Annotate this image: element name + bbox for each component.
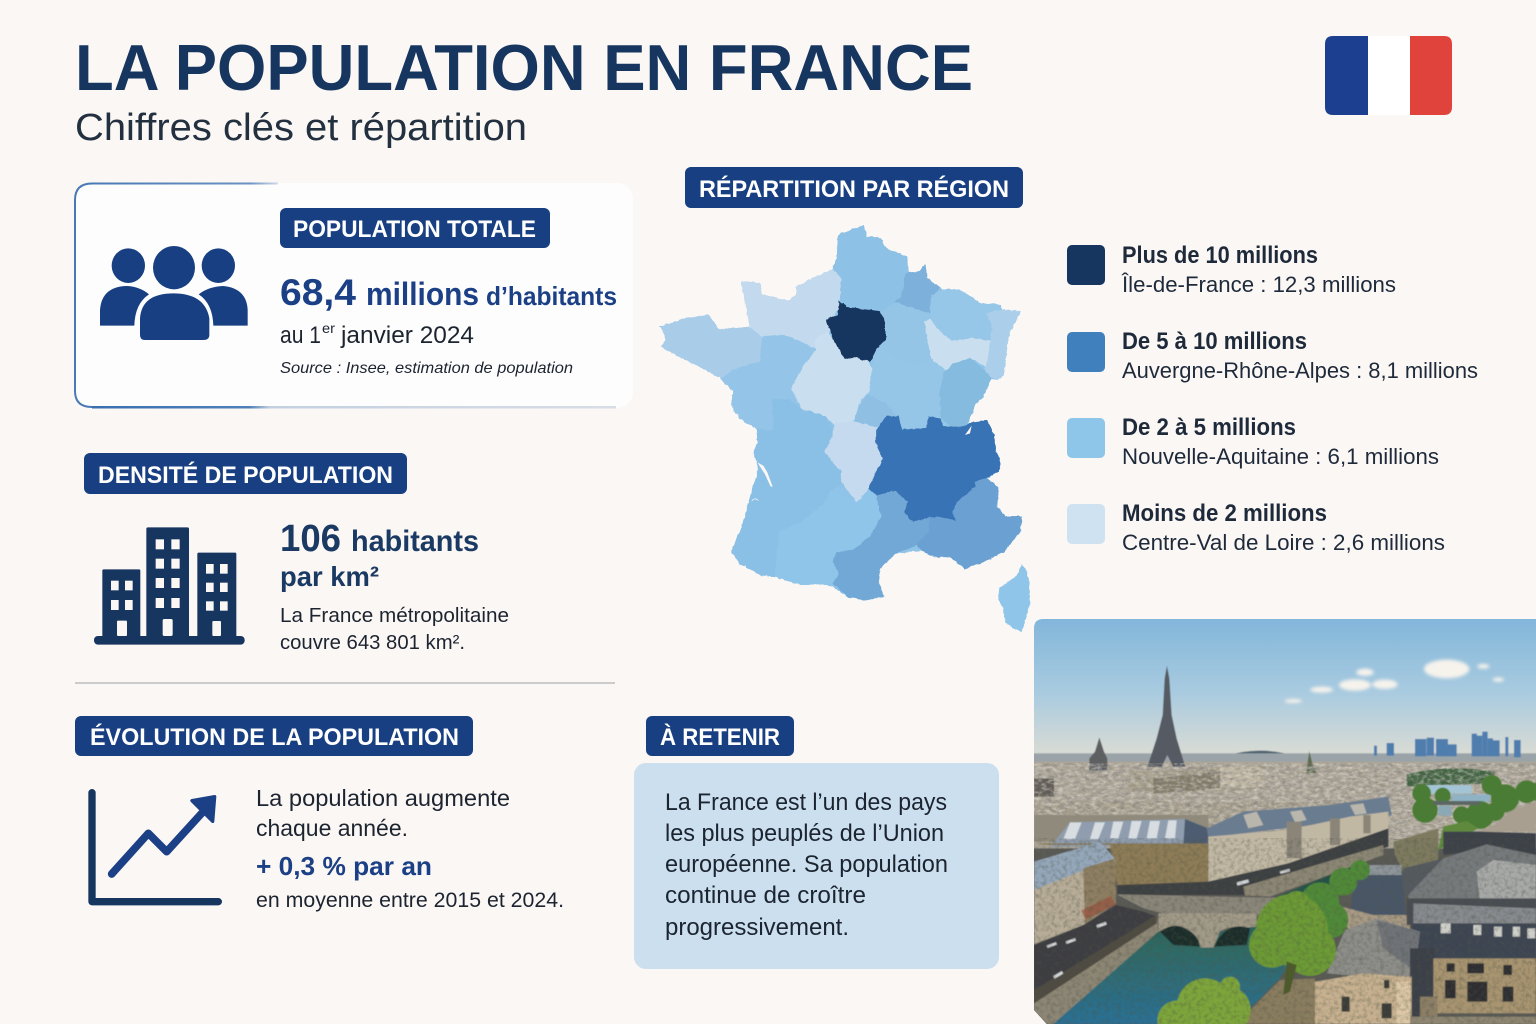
river [1043, 860, 1367, 1024]
subtitle: Chiffres clés et répartition [75, 107, 527, 149]
heading: densité: DENSITÉ DE POPULATION [98, 461, 393, 489]
legend item: plus de 10 millions [1067, 242, 1396, 297]
region: Champagne [877, 302, 933, 367]
panel: densité de population [84, 453, 509, 654]
road [1034, 905, 1157, 998]
key figure: 68,4 millions: millions [366, 276, 479, 312]
date: er [322, 320, 335, 336]
key figure: 68,4 millions: d’habitants [486, 281, 617, 311]
heading: évolution [75, 716, 473, 756]
density note: couvre 643 801 km². [280, 631, 465, 654]
icon: buildings [94, 527, 245, 645]
buildings row [1050, 818, 1186, 847]
source: Source : Insee, estimation de population [280, 360, 573, 377]
icon: group of people [100, 246, 248, 340]
key figure: 106 habitants par km² [280, 518, 479, 592]
region: Pays de la Loire [722, 335, 817, 430]
photo: Paris skyline and the Seine [1030, 615, 1536, 1024]
takeaway text: progressivement. [665, 914, 849, 941]
region: Bretagne [660, 315, 765, 380]
region: Hauts-de-France [833, 226, 908, 317]
legend item: moins de 2 millions: Centre-Val de Loire : 2,6 millions [1122, 530, 1445, 555]
map: France regions [660, 226, 1029, 632]
evolution text: La population augmente [256, 785, 510, 811]
evolution text: + 0,3 % par an [256, 851, 432, 881]
region: Provence-Alpes-Côte d'Azur [917, 478, 1022, 568]
region: Normandie [742, 270, 843, 352]
key figure: 68,4 millions [280, 272, 617, 313]
density note [280, 604, 509, 654]
region: Centre-Val de Loire [792, 332, 873, 425]
rooftops band left [1034, 815, 1208, 842]
legend item: de 2 à 5 millions: De 2 à 5 millions [1122, 414, 1296, 441]
key figure: 106 habitants par km²: 106 [280, 518, 341, 560]
region: Nouvelle-Aquitaine [732, 395, 843, 577]
key figure: 106 habitants par km²: par km² [280, 561, 379, 592]
region: Haute-Marne [925, 319, 990, 372]
panel: évolution de la population [75, 716, 564, 912]
legend item: de 5 à 10 millions: Auvergne-Rhône-Alpes : 8,1 millions [1122, 358, 1478, 383]
key figure: 106 habitants par km²: habitants [351, 525, 479, 558]
road upper bank [1117, 828, 1388, 895]
legend item: plus de 10 millions: Île-de-France : 12,3 millions [1121, 272, 1396, 297]
heading: évolution: ÉVOLUTION DE LA POPULATION [90, 723, 459, 751]
legend item: moins de 2 millions: Moins de 2 millions [1122, 500, 1327, 527]
legend item: de 2 à 5 millions: Nouvelle-Aquitaine : 6,1 millions [1122, 444, 1439, 469]
takeaway text: les plus peuplés de l’Union [665, 820, 944, 847]
panel: population totale [75, 182, 633, 408]
key figure: 68,4 millions: 68,4 [280, 272, 356, 313]
legend item: de 5 à 10 millions: De 5 à 10 millions [1122, 328, 1307, 355]
evolution text [256, 785, 564, 912]
cars [1047, 869, 1290, 979]
region: Auvergne-Rhône-Alpes [869, 417, 1000, 522]
icon: growth chart [92, 793, 218, 902]
legend item: de 2 à 5 millions [1067, 414, 1439, 469]
right buildings [1393, 828, 1439, 871]
legend item: moins de 2 millions [1067, 500, 1445, 555]
heading: densité [84, 453, 407, 494]
region: Nièvre [854, 395, 896, 428]
takeaway text: continue de croître [665, 882, 866, 909]
bridge [1117, 894, 1277, 917]
evolution text: chaque année. [256, 815, 408, 841]
heading: population totale: POPULATION TOTALE [293, 216, 536, 243]
legend item: plus de 10 millions: Plus de 10 millions [1122, 242, 1318, 269]
heading: répartition par région [685, 167, 1023, 208]
region: Lorraine [930, 290, 1002, 342]
region: Occitanie ouest [775, 490, 882, 587]
density note: La France métropolitaine [280, 604, 509, 627]
region: Île-de-France [827, 302, 885, 362]
date [280, 320, 474, 349]
takeaway text: européenne. Sa population [665, 851, 948, 878]
embankments [1034, 915, 1158, 1024]
trees [1240, 978, 1315, 1024]
icon: French flag [1325, 36, 1452, 115]
region: Franche-Comté [940, 358, 992, 428]
heading: répartition par région: RÉPARTITION PAR RÉGION [699, 175, 1009, 203]
panel: à retenir [634, 716, 999, 969]
region: Limousin [825, 422, 883, 502]
takeaway text: La France est l’un des pays [665, 789, 947, 816]
heading: à retenir [646, 716, 794, 756]
date: au 1 [280, 322, 321, 349]
region: Ardennes [895, 264, 940, 313]
legend [1067, 242, 1478, 555]
heading: population totale [280, 208, 550, 248]
date: janvier 2024 [340, 322, 474, 349]
legend item: de 5 à 10 millions [1067, 328, 1478, 383]
region: Corse [998, 564, 1029, 632]
heading: à retenir: À RETENIR [660, 723, 780, 751]
region: Bourgogne [858, 347, 952, 430]
title: LA POPULATION EN FRANCE [75, 31, 973, 104]
evolution text: en moyenne entre 2015 et 2024. [256, 889, 564, 912]
region: Occitanie est [833, 490, 930, 600]
region: Alsace [985, 310, 1020, 380]
takeaway text [665, 789, 948, 941]
